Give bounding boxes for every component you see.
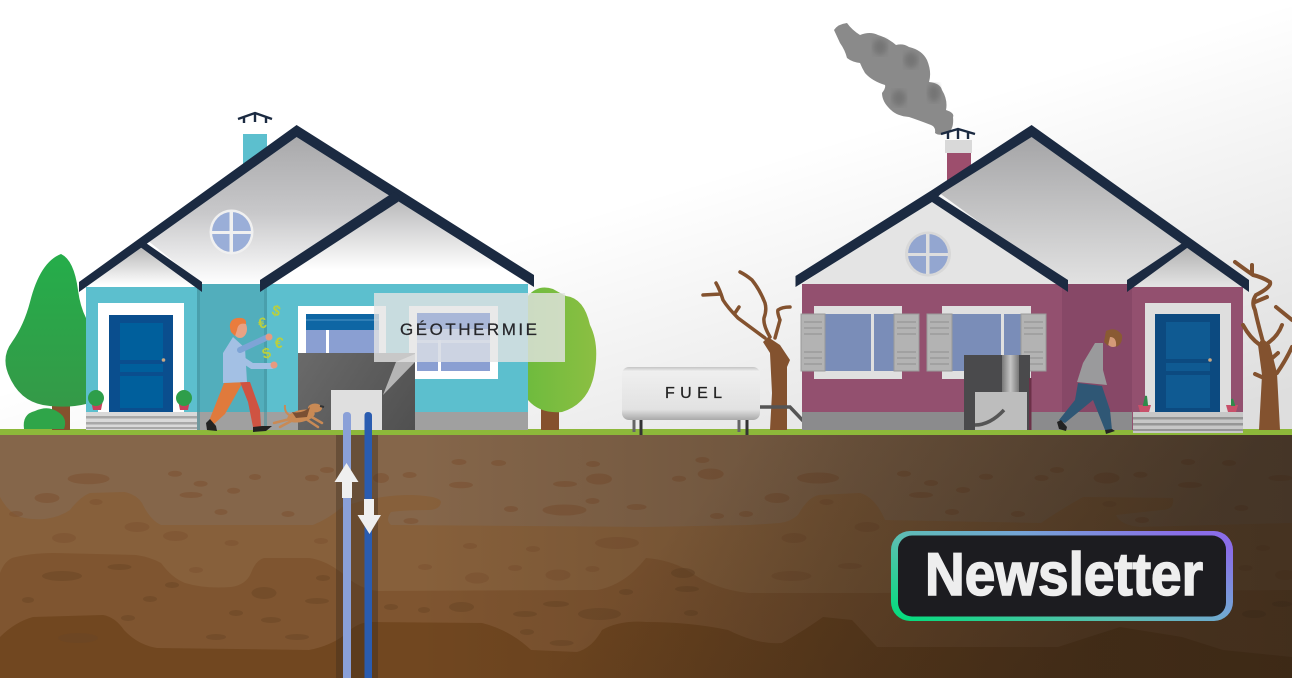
round attic window: [210, 210, 254, 254]
window right with shutters: [927, 306, 1046, 379]
arrow up: [334, 463, 358, 498]
steps: [86, 412, 197, 430]
money symbols: [257, 302, 285, 363]
door blue: [1145, 303, 1231, 412]
chimney teal: [238, 113, 272, 166]
chimney pink: [941, 129, 975, 181]
window left with shutters: [801, 306, 919, 379]
round attic window: [905, 232, 951, 276]
soil stones: [9, 457, 1292, 584]
gables: [802, 133, 1243, 287]
window right: [409, 306, 498, 379]
house: fuel (pink): [801, 129, 1243, 433]
door blue: [98, 303, 184, 412]
window with blind: [298, 306, 386, 356]
roof left house: [79, 125, 534, 292]
roof right house: [796, 125, 1249, 292]
tree: green conifer: [5, 254, 86, 430]
geothermal machine: [298, 353, 415, 430]
walls: [86, 284, 528, 430]
soil layer 2: [0, 492, 1292, 678]
fuel tank: [622, 367, 760, 435]
plants: [88, 390, 192, 410]
borehole shaft: [336, 435, 378, 678]
label callout: GÉOTHERMIE: GÉOTHERMIE: [400, 320, 537, 339]
money symbols: $: [270, 302, 283, 321]
ground: soil layers: [0, 434, 1292, 678]
fuel tank: FUEL: [665, 385, 722, 402]
house: geothermal (teal): [86, 113, 528, 430]
label callout: GÉOTHERMIE: [374, 293, 565, 395]
newsletter badge: [891, 531, 1233, 621]
dead tree left: [703, 272, 790, 430]
fuel pipe: [754, 407, 1004, 425]
money symbols: €: [257, 314, 269, 333]
dog running: [274, 404, 324, 427]
soil layer 4: [0, 615, 1292, 678]
money symbols: €: [273, 334, 285, 353]
man with money: [206, 302, 285, 432]
gables: [86, 134, 528, 287]
walls: [802, 284, 1243, 430]
geothermal pipe: dark supply: [364, 412, 372, 678]
steps: [1133, 412, 1243, 433]
boiler: [964, 355, 1032, 430]
money symbols: $: [260, 344, 273, 363]
tree: light green round tree: [528, 288, 596, 430]
bush: [24, 408, 65, 429]
sad man walking: [1057, 329, 1122, 434]
smoke plume: [834, 23, 953, 135]
dead tree right: [1235, 262, 1292, 430]
arrow down: [358, 499, 381, 534]
soil layer 3: [0, 553, 1292, 678]
wilted plants: [1138, 396, 1238, 412]
geothermal pipe: light return: [343, 412, 351, 678]
newsletter badge: Newsletter: [925, 541, 1203, 608]
ground: grass strip: [0, 429, 1292, 435]
